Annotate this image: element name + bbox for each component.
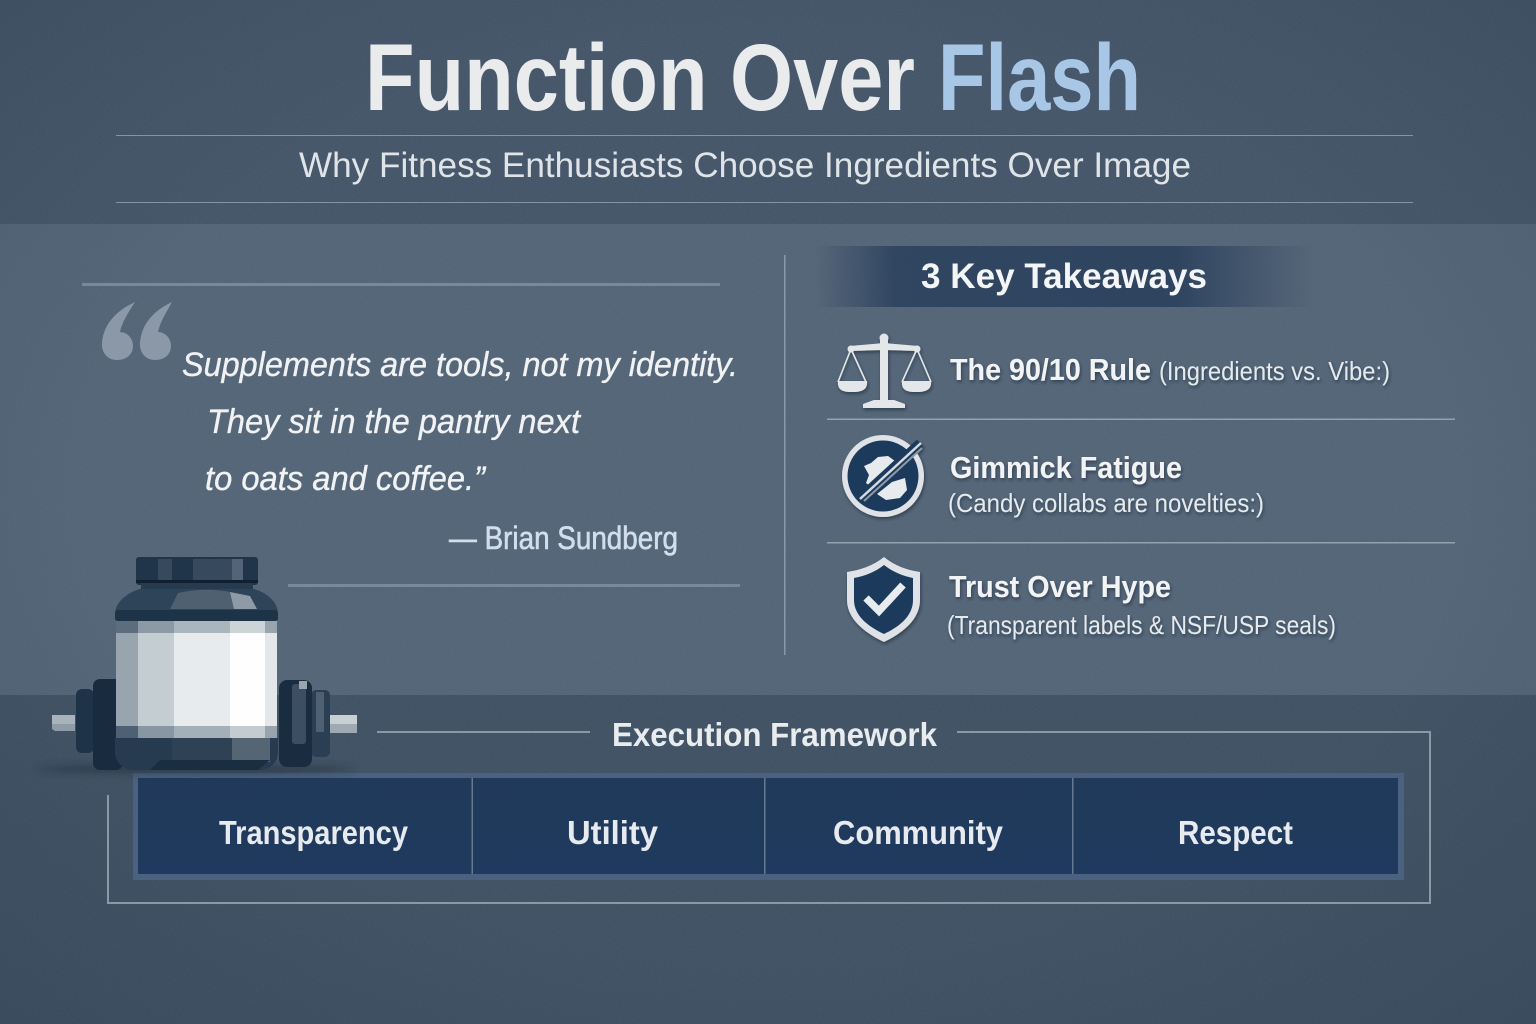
icon: balance scale [838, 334, 931, 408]
takeaway 3 text: (Transparent labels & NSF/USP seals) [947, 610, 1336, 640]
takeaway 3 [847, 557, 1336, 642]
quote attribution: — Brian Sundberg [449, 520, 678, 556]
panel: quote [82, 283, 740, 587]
takeaway 2 text: (Candy collabs are novelties:) [948, 488, 1264, 518]
dumbbell left [52, 679, 123, 770]
quote text: Supplements are tools, not my identity. [182, 346, 738, 384]
takeaway 3 text [947, 569, 1336, 640]
framework bar [133, 773, 1404, 880]
icon: opening quotation mark [102, 302, 172, 360]
background: middle band [0, 224, 1536, 695]
takeaway 2 text [948, 450, 1264, 518]
jar label [116, 621, 277, 738]
takeaway 1 text: (Ingredients vs. Vibe:) [1159, 356, 1390, 386]
quote text: They sit in the pantry next [207, 403, 581, 441]
pillar: community: Community [833, 814, 1004, 851]
takeaway 3 text: Trust Over Hype [949, 569, 1171, 604]
framework bracket outline [108, 732, 1430, 903]
illustration: supplement jar and dumbbell [35, 557, 357, 772]
dumbbell right [279, 680, 357, 767]
takeaway 1 text [950, 352, 1390, 387]
jar lid [136, 557, 258, 589]
takeaway 2 text: Gimmick Fatigue [950, 450, 1182, 485]
jar body [115, 589, 278, 770]
takeaway 1 text: The 90/10 Rule [950, 352, 1151, 387]
title: Function Over [365, 25, 915, 131]
icon: no gimmicks [842, 435, 924, 517]
pillar: utility: Utility [567, 814, 659, 851]
framework heading: Execution Framework [612, 716, 938, 753]
background: header band [0, 0, 1536, 224]
icon: shield with check [847, 557, 920, 642]
panel: key takeaways [815, 246, 1455, 642]
takeaways heading: 3 Key Takeaways [921, 257, 1207, 296]
pillar: respect: Respect [1178, 814, 1293, 851]
takeaway 1 [838, 334, 1390, 408]
quote text: to oats and coffee.” [205, 460, 487, 498]
panel: execution framework [108, 716, 1430, 903]
ground shadow [35, 766, 355, 772]
pillar: transparency: Transparency [219, 814, 409, 851]
takeaway 2 [842, 435, 1264, 518]
quote text [182, 346, 738, 498]
background: lower band [0, 695, 1536, 1024]
takeaways heading [815, 246, 1315, 307]
title: Flash [938, 25, 1141, 131]
subtitle with rules: Why Fitness Enthusiasts Choose Ingredients Over Image [299, 146, 1191, 185]
